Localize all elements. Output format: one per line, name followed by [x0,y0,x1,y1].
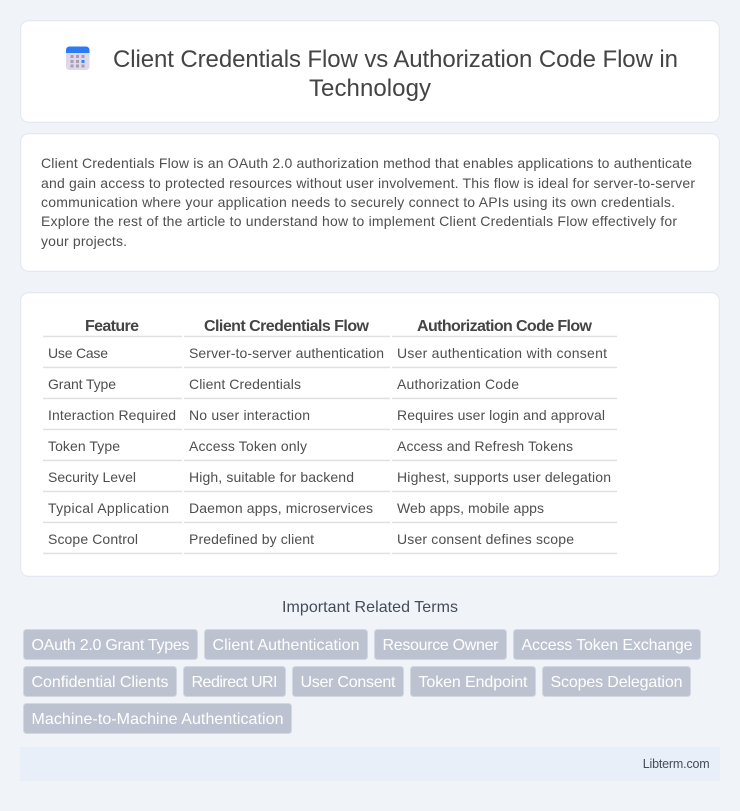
panel: comparison table [21,293,719,576]
table row: use case: Use Case [48,345,108,361]
tag: Resource Owner: Resource Owner [382,637,499,654]
tag: Redirect URI: Redirect URI [192,674,278,691]
table header row: Client Credentials Flow [204,318,370,335]
tag: Scopes Delegation: Scopes Delegation [550,674,682,691]
table row: security level: Security Level [48,469,136,485]
tag: Scopes Delegation [542,666,690,696]
table row: security level [43,469,617,492]
tag: User Consent: User Consent [300,674,396,691]
table row: scope control: Predefined by client [189,531,314,547]
table row: interaction required: Requires user login and approval [397,407,605,423]
text block: description: communication where your application needs to securely connect to APIs using its own credentials. [41,194,675,210]
tag: Token Endpoint: Token Endpoint [418,674,528,691]
tag: Confidential Clients [24,666,176,696]
table row: token type: Access and Refresh Tokens [397,438,573,454]
footer: Libterm.com [643,757,710,771]
tag: Confidential Clients: Confidential Clients [32,674,168,691]
tag: User Consent [292,666,404,696]
tag: Client Authentication: Client Authentication [212,637,360,654]
table row: use case [43,345,617,368]
table header row: Authorization Code Flow [417,318,593,335]
table row: grant type [43,376,617,399]
panel: header [21,21,719,122]
tag: Token Endpoint [410,666,536,696]
table row: typical application [43,500,617,523]
table row: interaction required: No user interaction [189,407,310,423]
table row: grant type: Authorization Code [397,376,519,392]
table row: interaction required [43,407,617,430]
table row: grant type: Grant Type [48,376,116,392]
table row: interaction required: Interaction Required [48,407,176,423]
text block: description: Client Credentials Flow is an OAuth 2.0 authorization method that enables applications to authenticate [41,155,692,171]
text block: description: Explore the rest of the article to understand how to implement Client Credentials Flow effectively for [41,213,677,229]
table header row [43,318,617,337]
text block: description [41,155,695,249]
tag: OAuth 2.0 Grant Types: OAuth 2.0 Grant Types [32,637,190,654]
table row: typical application: Typical Application [48,500,169,516]
tag: Redirect URI [184,666,286,696]
table row: scope control: Scope Control [48,531,138,547]
panel: description [21,134,719,271]
tag: Machine-to-Machine Authentication: Machine-to-Machine Authentication [32,711,284,728]
text block: description: and gain access to protected resources without user involvement. This flow is ideal for server-to-server [41,175,695,191]
table header row: Feature [85,318,139,335]
tag: Access Token Exchange: Access Token Exchange [522,637,693,654]
table row: typical application: Daemon apps, microservices [189,500,373,516]
table row: token type: Access Token only [189,438,307,454]
text block: description: your projects. [41,233,127,249]
tag: Client Authentication [204,630,368,660]
table row: token type: Token Type [48,438,120,454]
tag: OAuth 2.0 Grant Types [24,630,198,660]
tag: Machine-to-Machine Authentication [24,704,292,734]
table row: token type [43,438,617,461]
title: Technology [309,75,431,102]
table row: use case: User authentication with consent [397,345,607,361]
heading: important related terms: Important Related Terms [282,599,458,616]
tag list: related terms [24,630,700,734]
icon: calendar [66,46,90,70]
table row: grant type: Client Credentials [189,376,301,392]
tag: Resource Owner [374,630,506,660]
table row: typical application: Web apps, mobile apps [397,500,544,516]
title [113,46,678,102]
table row: scope control: User consent defines scope [397,531,574,547]
footer [20,747,720,781]
tag: Access Token Exchange [514,630,700,660]
table row: security level: Highest, supports user delegation [397,469,611,485]
title: Client Credentials Flow vs Authorization Code Flow in [113,46,678,73]
table row: scope control [43,531,617,554]
table row: use case: Server-to-server authentication [189,345,384,361]
table row: security level: High, suitable for backend [189,469,354,485]
